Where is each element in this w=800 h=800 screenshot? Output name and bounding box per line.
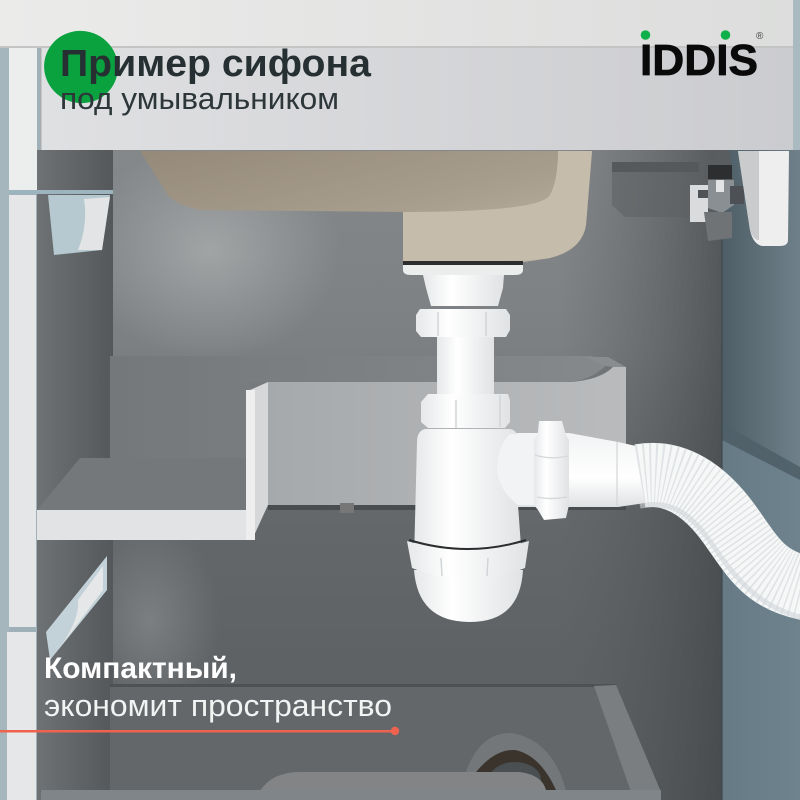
flange — [403, 265, 523, 275]
basin — [140, 151, 592, 265]
title — [60, 43, 372, 116]
shelf / drawer — [37, 356, 626, 540]
upper nut — [416, 309, 510, 337]
elbow — [497, 434, 535, 505]
bottle body — [414, 429, 522, 560]
right white bracket — [738, 151, 789, 246]
middle nut — [421, 394, 510, 428]
upper pipe — [437, 336, 494, 398]
caption: Компактный, — [44, 652, 237, 685]
callout line with dot — [0, 727, 399, 735]
subtitle: под умывальником — [60, 81, 339, 116]
side pipe — [505, 433, 645, 507]
towel — [260, 772, 546, 791]
logo: IDDIS: ® — [756, 31, 764, 42]
siphon — [403, 265, 800, 622]
glass clip upper — [48, 195, 110, 255]
title: Пример сифона — [60, 43, 372, 85]
cap — [414, 570, 523, 622]
left side panel strips — [0, 48, 113, 800]
drain — [466, 733, 566, 798]
faucet valve — [690, 150, 744, 241]
logo: IDDIS: IDDIS — [640, 36, 758, 85]
accent: green circle — [34, 21, 128, 113]
black seal ring — [409, 540, 526, 549]
caption — [44, 652, 392, 723]
corrugated hose — [640, 475, 800, 620]
lower sink — [40, 684, 661, 800]
cone — [423, 275, 504, 306]
side nut — [534, 421, 569, 520]
worktop — [0, 0, 800, 150]
lower nut — [407, 541, 529, 579]
glass clip lower — [46, 556, 107, 660]
caption line 2: экономит пространство — [44, 688, 392, 723]
